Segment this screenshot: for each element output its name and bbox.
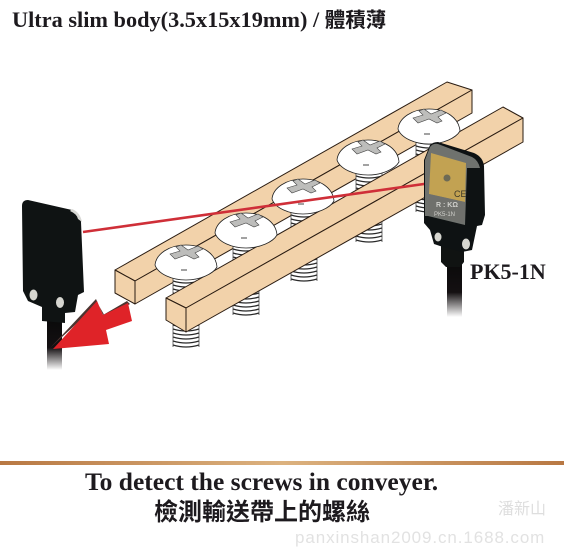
screw threads [173, 130, 442, 349]
left sensor cable [47, 320, 62, 370]
right sensor bevel [425, 144, 480, 225]
right sensor body [424, 142, 485, 252]
divider rule [0, 461, 564, 465]
front wooden beam [166, 107, 523, 332]
left sensor body [22, 200, 84, 323]
left sensor [22, 200, 84, 370]
sensor label: PK5-1N [470, 259, 546, 284]
red detection beam [83, 182, 438, 232]
red arrow [50, 299, 132, 349]
right sensor neck [441, 240, 464, 267]
left sensor mounting holes [30, 290, 64, 308]
screw heads [155, 109, 460, 280]
watermark name: 潘新山 [498, 501, 546, 518]
caption: Chinese: 檢測輸送帶上的螺絲 [154, 499, 370, 526]
right sensor PK5-1N: R : KΩ [436, 202, 458, 209]
right sensor cable [447, 262, 462, 317]
back wooden beam [115, 82, 472, 304]
right sensor PK5-1N [424, 142, 485, 317]
right sensor gold face [429, 153, 466, 202]
watermark url: panxinshan2009.cn.1688.com [295, 528, 545, 547]
right sensor mounting holes [434, 232, 470, 250]
title: Ultra slim body(3.5x15x19mm) / 體積薄 [12, 7, 386, 32]
right sensor grey label area [428, 194, 465, 223]
caption: English: To detect the screws in conveyer. [85, 467, 438, 496]
right sensor PK5-1N: PK5-1N [434, 212, 455, 218]
lens [444, 174, 450, 182]
face marks: CE [454, 189, 467, 199]
